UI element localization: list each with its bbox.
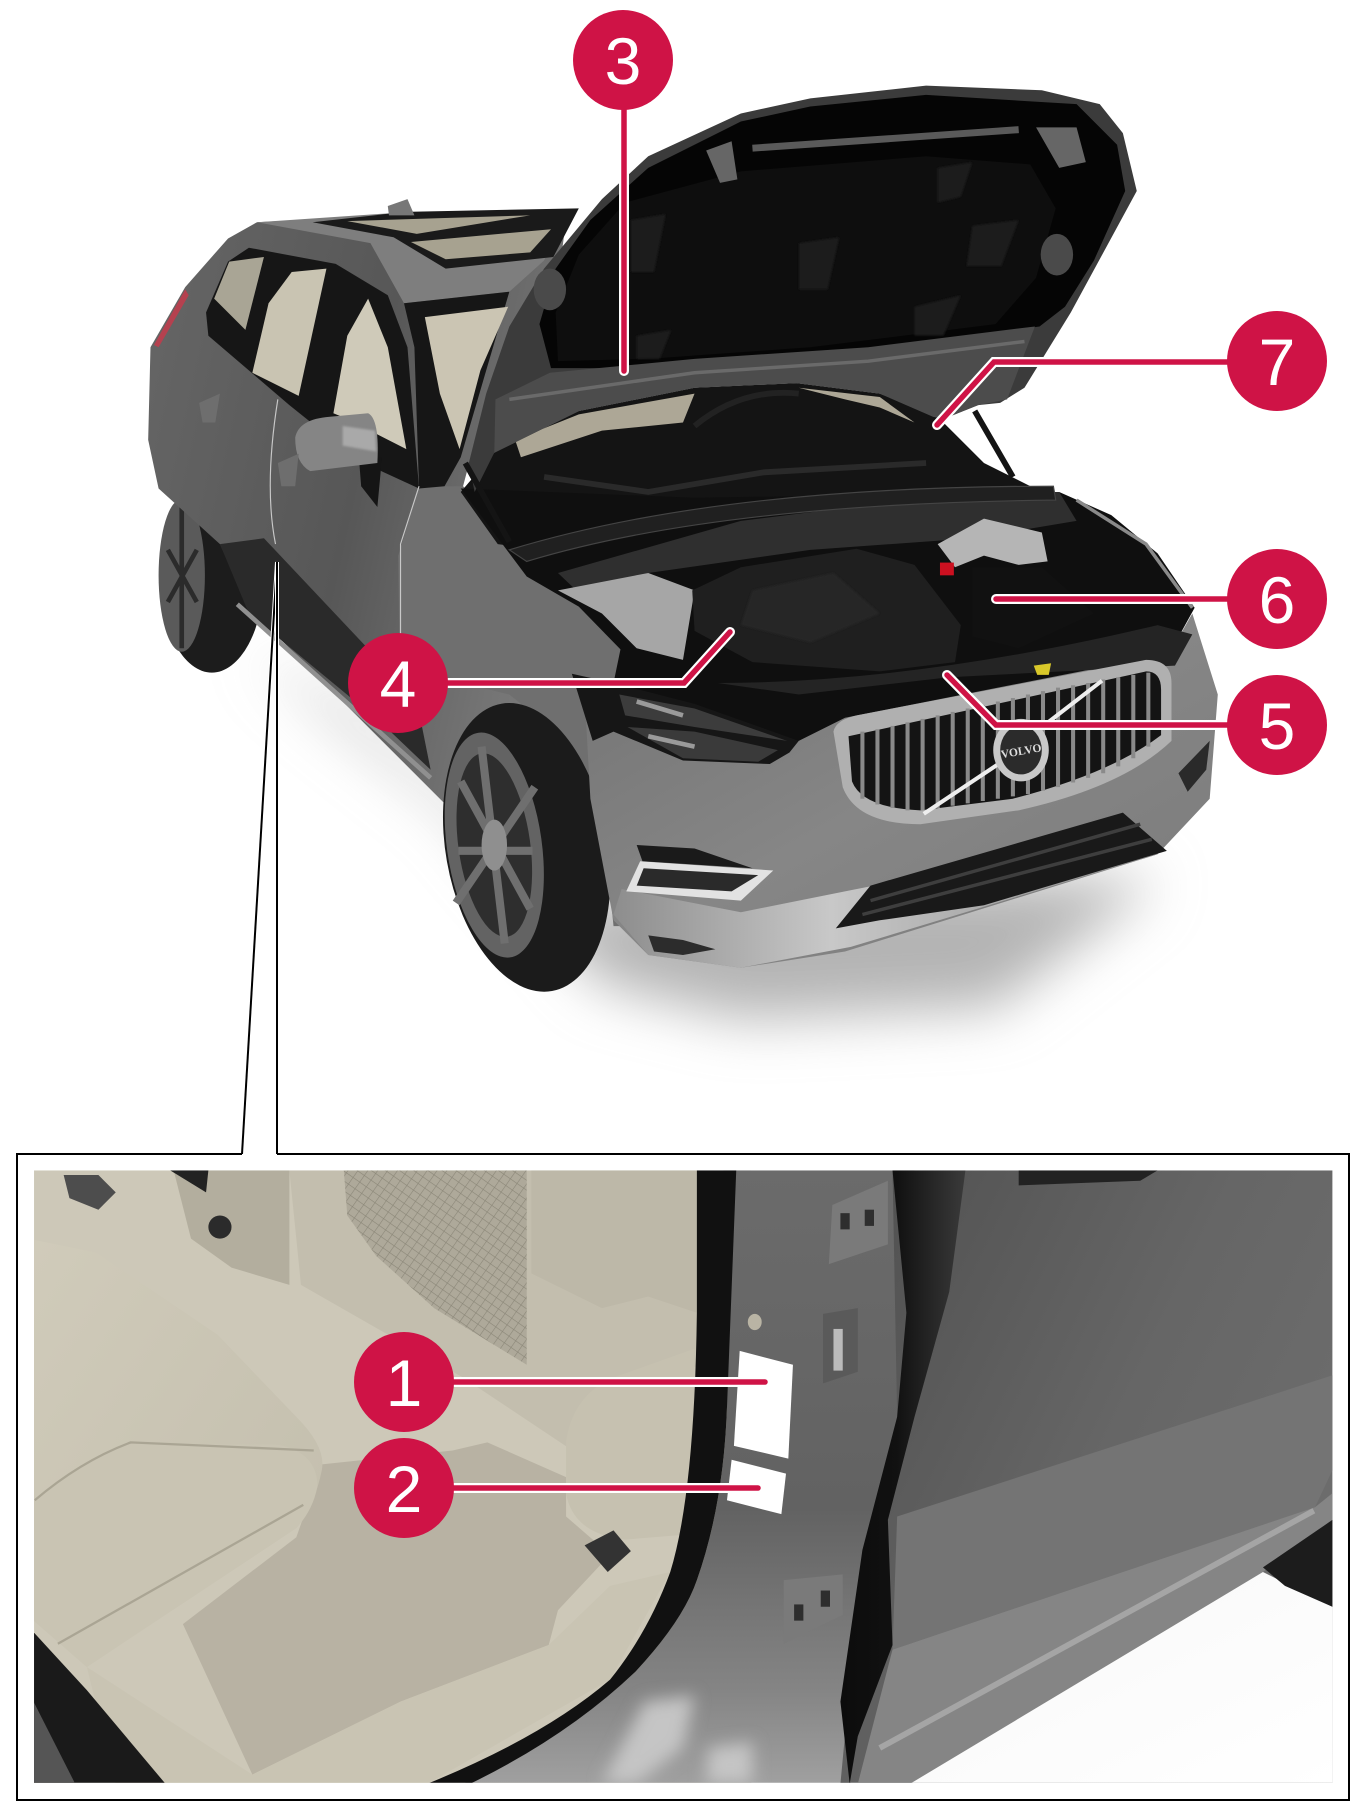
fog light surround bbox=[626, 845, 773, 901]
front bumper bbox=[585, 614, 1218, 968]
rear bracket bbox=[174, 1170, 289, 1285]
engine cover bbox=[692, 549, 961, 671]
cabin seats bbox=[515, 388, 915, 457]
callout 1: 1 bbox=[386, 1346, 422, 1420]
steering wheel bbox=[695, 393, 799, 426]
door outer panel bbox=[840, 1170, 1332, 1784]
callout 7: 7 bbox=[1259, 325, 1295, 399]
cowl seal bbox=[509, 486, 1056, 561]
seat latch bbox=[585, 1530, 631, 1572]
body sill trim bbox=[116, 1782, 429, 1783]
cushion front bbox=[302, 1490, 316, 1521]
grille bbox=[833, 660, 1171, 824]
pointer lines from car to inset bbox=[242, 562, 277, 1154]
callout 1 bbox=[354, 1332, 765, 1432]
headlight bbox=[572, 674, 799, 764]
door surround black bbox=[840, 1170, 965, 1784]
pointer left edge bbox=[242, 562, 277, 1154]
door handles bbox=[199, 394, 299, 486]
door sill highlight bbox=[858, 1493, 1332, 1784]
interior background bbox=[34, 1170, 751, 1784]
floor carpet bbox=[183, 1442, 610, 1775]
callout 2 bbox=[354, 1438, 758, 1538]
windscreen bbox=[404, 292, 509, 489]
red filler cap bbox=[940, 563, 954, 575]
seat side support bbox=[574, 1514, 675, 1536]
front tyre and rim bbox=[422, 690, 632, 1005]
callout 3 bbox=[573, 10, 673, 371]
callout 2: 2 bbox=[386, 1452, 422, 1526]
volvo emblem: VOLVO bbox=[1000, 741, 1042, 761]
tyre edge in arch bbox=[34, 1702, 75, 1784]
front door window bbox=[333, 299, 406, 449]
right fender rim bbox=[1077, 500, 1192, 608]
inset frame bbox=[17, 1154, 1349, 1800]
engine bay background bbox=[461, 489, 1195, 741]
lower fog lamp bbox=[648, 935, 715, 955]
interior behind windscreen bbox=[425, 307, 508, 449]
yellow cap bbox=[1034, 663, 1051, 675]
seat cushion bbox=[302, 1441, 322, 1487]
callout 5: 5 bbox=[1259, 689, 1295, 763]
roof and sunroof bbox=[257, 199, 579, 303]
callout 7 bbox=[937, 311, 1327, 425]
car body bbox=[148, 211, 695, 949]
door sill bbox=[220, 538, 431, 770]
cabin seen below hood bbox=[461, 383, 1042, 556]
white ground corner bbox=[910, 1572, 1332, 1784]
callout 6 bbox=[996, 549, 1327, 649]
rear quarter window bbox=[214, 257, 264, 330]
top-left clip bbox=[64, 1175, 116, 1210]
hood black insulation bbox=[539, 95, 1125, 368]
inset door sill illustration bbox=[34, 1170, 1332, 1784]
pillar recesses bbox=[784, 1181, 888, 1592]
hood strip ridge bbox=[509, 341, 1024, 399]
pillar lower highlight bbox=[602, 1696, 752, 1784]
callout 6: 6 bbox=[1259, 563, 1295, 637]
pillar slots bbox=[794, 1210, 874, 1621]
callout 3: 3 bbox=[605, 24, 641, 98]
wing mirror bbox=[295, 413, 382, 507]
side marker bbox=[1178, 741, 1210, 792]
front fender bbox=[398, 486, 810, 926]
silver strut tower bbox=[938, 519, 1048, 567]
battery box bbox=[972, 567, 1094, 648]
body pillar bbox=[463, 1170, 920, 1784]
anchor bolt bbox=[208, 1215, 232, 1239]
hood round bumpers bbox=[534, 234, 1073, 310]
sill highlight line bbox=[880, 1511, 1314, 1748]
ground shadow bbox=[249, 648, 1158, 1019]
callout 5 bbox=[947, 675, 1327, 775]
wiper arms bbox=[544, 463, 926, 492]
hood lower strip bbox=[494, 326, 1035, 453]
scuttle panel bbox=[558, 492, 1077, 593]
pointer right edge bbox=[275, 562, 279, 1154]
rear seat back bbox=[289, 1170, 697, 1447]
door seal bbox=[427, 1170, 736, 1784]
seat mesh pocket bbox=[344, 1170, 527, 1365]
door seams bbox=[270, 399, 419, 648]
rear red reflector edge bbox=[154, 289, 189, 347]
engine cover sheen bbox=[741, 573, 880, 642]
white label 2 bbox=[727, 1460, 786, 1514]
rear door window bbox=[252, 269, 326, 396]
callout 4 bbox=[348, 632, 730, 733]
rear tyre fragment bbox=[1263, 1520, 1332, 1607]
hood front bar bbox=[752, 130, 1019, 148]
side windows frame bbox=[206, 248, 419, 489]
door lower crease bbox=[893, 1375, 1332, 1650]
wheel arch corner bbox=[34, 1632, 166, 1784]
car illustration with open hood bbox=[148, 86, 1218, 1019]
hood struts bbox=[465, 411, 1013, 542]
black seat trim bbox=[170, 1170, 208, 1192]
pillar round plug bbox=[748, 1314, 762, 1330]
upper right trim bbox=[531, 1170, 697, 1313]
opened hood bbox=[469, 86, 1137, 492]
lower air intake bbox=[836, 813, 1167, 928]
callout 4: 4 bbox=[380, 647, 416, 721]
hood hinges bbox=[706, 127, 1086, 183]
door handle bbox=[1019, 1170, 1158, 1185]
hood pads bbox=[631, 162, 1019, 359]
hood edge bbox=[469, 86, 1137, 492]
lower silver bumper bbox=[614, 854, 1158, 968]
lower intake slats bbox=[862, 824, 1152, 915]
front plastic cover bbox=[718, 625, 1192, 695]
rear wheel bbox=[159, 478, 264, 673]
lower silver strip bbox=[237, 604, 431, 778]
white label 1 bbox=[734, 1351, 793, 1459]
hood insulation panel bbox=[556, 156, 1056, 361]
cushion seam bbox=[35, 1442, 314, 1644]
volvo emblem bbox=[993, 719, 1049, 781]
silver left engine parts bbox=[558, 573, 695, 660]
